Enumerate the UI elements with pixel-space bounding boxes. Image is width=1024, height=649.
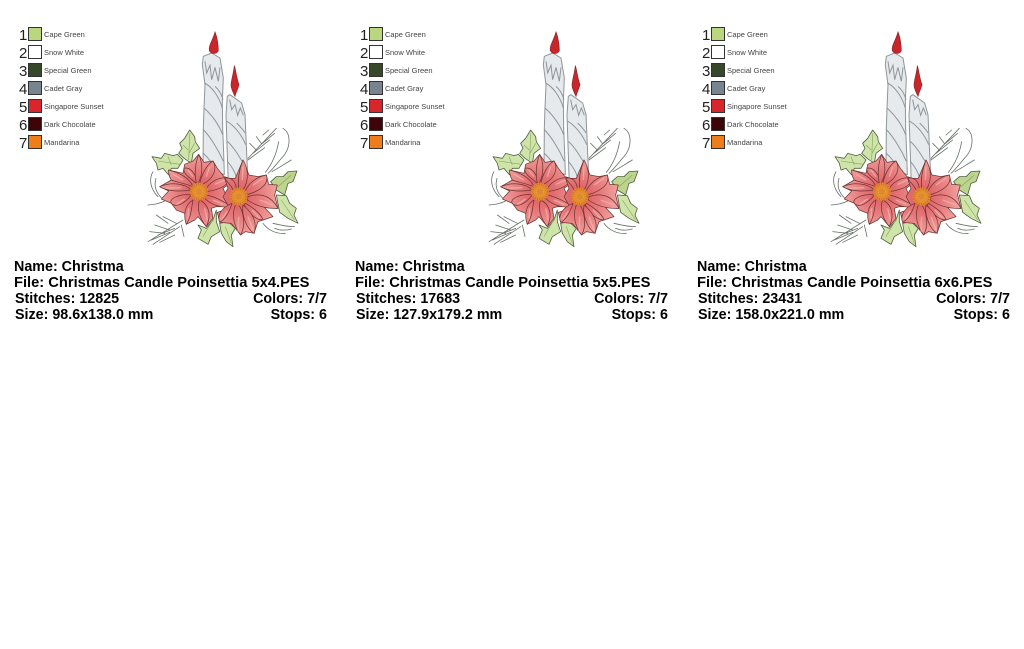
color legend 1: 1 [19, 27, 27, 44]
design details 2 [355, 259, 668, 323]
color legend 3 [702, 27, 788, 152]
design details 1: Colors: 7/7 [253, 291, 327, 307]
color legend 2: 6 [360, 117, 368, 134]
color legend 3: 2 [702, 45, 710, 62]
color legend 1 [19, 27, 105, 152]
design details 3: File: Christmas Candle Poinsettia 6x6.PES [697, 275, 993, 291]
color legend 1: 3 [19, 63, 27, 80]
design details 2: Stops: 6 [612, 307, 668, 323]
color legend 2: Snow White [385, 48, 425, 57]
color legend 2: 4 [360, 81, 368, 98]
color legend 1: Snow White [44, 48, 84, 57]
color legend 1: Special Green [44, 66, 92, 75]
color legend 1: Dark Chocolate [44, 120, 96, 129]
design details 3: Colors: 7/7 [936, 291, 1010, 307]
color legend 3: Special Green [727, 66, 775, 75]
design details 3: Stops: 6 [954, 307, 1010, 323]
embroidery: candles and poinsettia 2 [489, 32, 639, 247]
design details 1: Size: 98.6x138.0 mm [15, 307, 153, 323]
color legend 1: 7 [19, 135, 27, 152]
design details 2: Stitches: 17683 [356, 291, 460, 307]
panel: 6x6 design [697, 27, 1010, 323]
design details 1: Name: Christma [14, 259, 125, 275]
design details 2: Colors: 7/7 [594, 291, 668, 307]
panel: 5x5 design [355, 27, 668, 323]
color legend 2: Cadet Gray [385, 84, 424, 93]
color legend 2: 3 [360, 63, 368, 80]
color legend 3: Cadet Gray [727, 84, 766, 93]
design details 1: File: Christmas Candle Poinsettia 5x4.PES [14, 275, 310, 291]
color legend 1: 4 [19, 81, 27, 98]
color legend 2: 7 [360, 135, 368, 152]
color legend 3: Cape Green [727, 30, 768, 39]
embroidery: candles and poinsettia 3 [831, 32, 981, 247]
color legend 1: 6 [19, 117, 27, 134]
panel: 5x4 design [14, 27, 327, 323]
color legend 3: Dark Chocolate [727, 120, 779, 129]
color legend 2: 5 [360, 99, 368, 116]
design details 2: Name: Christma [355, 259, 466, 275]
design details 3: Name: Christma [697, 259, 808, 275]
color legend 1: 5 [19, 99, 27, 116]
color legend 1: 2 [19, 45, 27, 62]
color legend 3: 1 [702, 27, 710, 44]
color legend 3: 7 [702, 135, 710, 152]
design details 2: File: Christmas Candle Poinsettia 5x5.PES [355, 275, 651, 291]
color legend 2: Dark Chocolate [385, 120, 437, 129]
color legend 3: 4 [702, 81, 710, 98]
embroidery: candles and poinsettia 1 [148, 32, 298, 247]
color legend 2: Cape Green [385, 30, 426, 39]
color legend 1: Cadet Gray [44, 84, 83, 93]
design details 3: Stitches: 23431 [698, 291, 802, 307]
color legend 1: Cape Green [44, 30, 85, 39]
color legend 1: Mandarina [44, 138, 80, 147]
color legend 3: 6 [702, 117, 710, 134]
color legend 3: Singapore Sunset [727, 102, 788, 111]
design details 3: Size: 158.0x221.0 mm [698, 307, 844, 323]
color legend 2 [360, 27, 446, 152]
color legend 3: 3 [702, 63, 710, 80]
design details 3 [697, 259, 1010, 323]
color legend 2: 1 [360, 27, 368, 44]
color legend 3: Snow White [727, 48, 767, 57]
design details 1: Stops: 6 [271, 307, 327, 323]
color legend 3: 5 [702, 99, 710, 116]
color legend 2: 2 [360, 45, 368, 62]
design details 2: Size: 127.9x179.2 mm [356, 307, 502, 323]
design details 1: Stitches: 12825 [15, 291, 119, 307]
design details 1 [14, 259, 327, 323]
color legend 3: Mandarina [727, 138, 763, 147]
color legend 2: Mandarina [385, 138, 421, 147]
color legend 1: Singapore Sunset [44, 102, 105, 111]
color legend 2: Singapore Sunset [385, 102, 446, 111]
color legend 2: Special Green [385, 66, 433, 75]
